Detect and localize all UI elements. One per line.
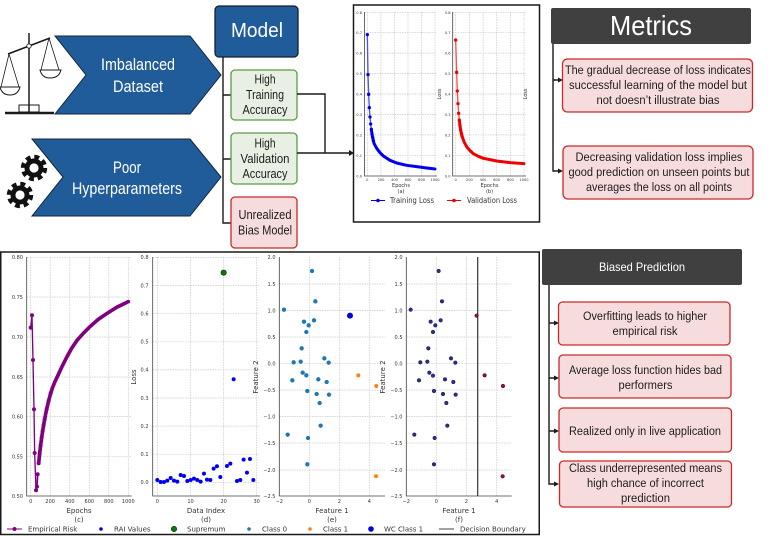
chart: feature scatter f with decision boundary: Feature 1 (442, 507, 476, 515)
chart: feature scatter e: 0.0 (268, 361, 276, 367)
model connector (223, 57, 231, 223)
chart: validation loss: 0.5 (445, 72, 450, 76)
chart: training loss: 200 (378, 178, 385, 182)
box: high validation accuracy: Validation (240, 152, 290, 166)
chart: validation loss: 0 (455, 178, 458, 182)
chart: training loss: 0.2 (356, 134, 362, 138)
chart: validation loss: 600 (493, 178, 501, 182)
chart: feature scatter e: −2.0 (263, 468, 276, 474)
metrics header: Metrics (610, 10, 692, 41)
chart: training loss: 800 (418, 178, 426, 182)
chart: feature scatter f with decision boundary: −0.5 (390, 388, 402, 394)
box: model (215, 6, 298, 57)
chart: training loss: 0.5 (356, 72, 362, 76)
chart: validation loss: 0.2 (445, 134, 450, 138)
chart: RAI values scatter: 20 (221, 499, 227, 505)
chart: feature scatter f with decision boundary: −2.5 (390, 494, 402, 500)
box: unrealized bias model (231, 197, 297, 248)
chart: validation loss: Loss (437, 88, 443, 99)
chart: validation loss: 200 (466, 178, 474, 182)
callout: average loss function (559, 355, 731, 398)
chart: feature scatter f with decision boundary: 2 (465, 499, 468, 505)
chart: validation loss: Loss (523, 88, 529, 99)
callout: decreasing validation loss (563, 146, 753, 199)
chart: RAI values scatter: 10 (187, 499, 194, 505)
chart: training loss: 0.8 (356, 11, 363, 15)
chart: validation loss: 800 (507, 178, 515, 182)
icon: gears (9, 157, 45, 206)
chart: feature scatter e: (e) (327, 516, 337, 524)
chart: feature scatter f with decision boundary: −2 (403, 499, 410, 505)
chart: empirical risk: 0.80 (12, 255, 23, 261)
chart: RAI values scatter: 0.7 (141, 284, 148, 290)
callout: overfitting: Overfitting leads to higher (583, 309, 707, 323)
chart: training loss: (a) (398, 189, 405, 195)
chart: validation loss: 0.8 (445, 11, 451, 15)
chart: RAI values scatter: (d) (201, 516, 211, 524)
callout: realized only in live application (559, 408, 732, 452)
callout: average loss function: Average loss function hides bad (569, 363, 722, 377)
callout: class underrepresented: Class underrepresented means (569, 461, 722, 475)
chart: RAI values scatter: 0.5 (141, 340, 148, 346)
chart: validation loss: Epochs (481, 183, 499, 189)
metrics connectors (553, 44, 563, 174)
panel: biased prediction (542, 249, 742, 507)
chart: RAI values scatter: 0.6 (141, 312, 148, 318)
chart: feature scatter e: 1.0 (268, 308, 276, 314)
chart: validation loss: 0.3 (445, 113, 450, 117)
chart: training loss: 0 (366, 178, 369, 182)
chart: feature scatter e: 0.5 (268, 335, 276, 341)
arrow: imbalanced dataset: Dataset (113, 78, 163, 96)
chart: RAI values scatter: Loss (130, 369, 138, 385)
legend: bias charts: Decision Boundary (460, 526, 526, 534)
callout: decreasing validation loss: good prediction on unseen points but (568, 165, 750, 179)
box: unrealized bias model: Bias Model (238, 224, 292, 238)
legend: loss charts: Training Loss (389, 196, 434, 205)
arrow: poor hyperparameters: Poor (113, 159, 141, 177)
chart: RAI values scatter (130, 255, 260, 524)
callout: class underrepresented: prediction (621, 491, 670, 505)
box: high validation accuracy (231, 133, 297, 184)
chart: empirical risk: 0.50 (12, 494, 23, 500)
chart: feature scatter e: −2 (276, 499, 283, 505)
biased prediction connectors (549, 285, 559, 486)
chart: RAI values scatter: 0.8 (141, 255, 148, 261)
legend: bias charts: Supremum (187, 526, 226, 534)
callout: gradual decrease of loss (562, 59, 752, 112)
chart: empirical risk: 0.65 (12, 375, 23, 381)
chart: training loss: Epochs (392, 183, 410, 189)
chart: validation loss (437, 11, 529, 195)
chart: empirical risk: 0.55 (12, 454, 23, 460)
chart: empirical risk: (c) (74, 516, 84, 524)
chart: training loss: 400 (391, 178, 399, 182)
chart: feature scatter e: 2 (338, 499, 341, 505)
chart: RAI values scatter: Data Index (187, 507, 225, 515)
callout: average loss function: performers (618, 378, 672, 392)
callout: decreasing validation loss: averages the loss on all points (586, 180, 732, 194)
chart: empirical risk: 1000 (122, 499, 135, 505)
panel: bias charts (1, 252, 539, 534)
biased prediction header: Biased Prediction (599, 260, 685, 274)
chart: validation loss: 0.0 (445, 174, 451, 178)
callout: gradual decrease of loss: not doesn’t illustrate bias (596, 93, 720, 107)
callout: overfitting: empirical risk (612, 324, 678, 338)
box: high validation accuracy: High (254, 136, 276, 150)
box: model: Model (231, 19, 283, 42)
chart: empirical risk: 0 (29, 499, 32, 505)
callout: gradual decrease of loss: The gradual decrease of loss indicates (565, 63, 751, 77)
chart: validation loss: (b) (486, 189, 493, 195)
chart: empirical risk: 0.60 (12, 414, 23, 420)
chart: feature scatter f with decision boundary: 1.5 (395, 282, 402, 288)
chart: empirical risk (12, 255, 135, 524)
legend: bias charts: Empirical Risk (28, 526, 78, 534)
chart: validation loss: 0.7 (445, 31, 450, 35)
chart: training loss (356, 11, 440, 195)
arrow: poor hyperparameters: Hyperparameters (72, 180, 182, 198)
chart: RAI values scatter: 0.4 (141, 368, 148, 374)
chart: feature scatter e: 2.0 (268, 255, 276, 261)
chart: empirical risk: 800 (104, 499, 114, 505)
chart: training loss: 0.1 (356, 154, 362, 158)
chart: training loss: 0.0 (356, 174, 363, 178)
box: high training accuracy: Accuracy (242, 103, 288, 117)
chart: empirical risk: 600 (85, 499, 94, 505)
arrow: imbalanced dataset (55, 36, 221, 114)
box: unrealized bias model: Unrealized (238, 208, 292, 222)
legend: loss charts: Validation Loss (467, 196, 517, 205)
chart: RAI values scatter: 0.3 (141, 396, 148, 402)
chart: feature scatter f with decision boundary: −1.0 (390, 414, 402, 420)
chart: feature scatter e: −1.0 (263, 414, 276, 420)
chart: feature scatter e (252, 255, 385, 524)
legend: loss charts (371, 196, 517, 205)
chart: feature scatter e: −0.5 (263, 388, 276, 394)
box: high training accuracy: Training (246, 88, 284, 102)
chart: feature scatter e: 1.5 (268, 282, 276, 288)
callout: class underrepresented: high chance of incorrect (587, 476, 705, 490)
legend: bias charts: Class 1 (323, 526, 348, 534)
legend: bias charts: Class 0 (262, 526, 287, 534)
chart: validation loss: 400 (480, 178, 487, 182)
chart: feature scatter f with decision boundary: 2.0 (395, 255, 402, 261)
chart: empirical risk: 200 (45, 499, 55, 505)
chart: feature scatter f with decision boundary: −1.5 (390, 441, 402, 447)
callout: class underrepresented (560, 461, 732, 507)
box: high validation accuracy: Accuracy (242, 167, 288, 181)
chart: feature scatter f with decision boundary: 0 (435, 499, 438, 505)
box: high training accuracy (231, 70, 297, 120)
chart: feature scatter e: Feature 2 (252, 360, 260, 394)
chart: feature scatter f with decision boundary: −2.0 (390, 468, 402, 474)
chart: feature scatter f with decision boundary: 0.0 (395, 361, 402, 367)
chart: validation loss: 1000 (519, 178, 529, 182)
chart: training loss: 1000 (430, 178, 440, 182)
metrics header (551, 8, 751, 44)
legend: bias charts (7, 526, 526, 534)
chart: empirical risk: 400 (65, 499, 75, 505)
chart: feature scatter e: 0 (308, 499, 311, 505)
chart: empirical risk: 0.70 (12, 335, 23, 341)
chart: RAI values scatter: 0.0 (141, 480, 148, 486)
arrow: accuracy to loss charts (297, 94, 354, 156)
chart: feature scatter f with decision boundary: Feature 2 (379, 360, 387, 394)
chart: validation loss: 0.4 (445, 92, 451, 96)
chart: RAI values scatter: 30 (254, 499, 260, 505)
panel: metrics (551, 8, 753, 199)
callout: realized only in live application: Realized only in live application (569, 424, 721, 438)
callout: decreasing validation loss: Decreasing validation loss implies (576, 150, 742, 164)
panel: loss charts (354, 5, 540, 222)
chart: feature scatter e: −1.5 (263, 441, 276, 447)
chart: feature scatter e: 4 (368, 499, 371, 505)
chart: feature scatter f with decision boundary: (f) (455, 516, 463, 524)
chart: validation loss: 0.1 (445, 154, 450, 158)
chart: RAI values scatter: 0 (156, 499, 159, 505)
chart: empirical risk: 0.75 (12, 295, 23, 301)
legend: bias charts: RAI Values (114, 526, 151, 534)
arrow: imbalanced dataset: Imbalanced (101, 56, 175, 74)
callout: gradual decrease of loss: successful learning of the model but (569, 78, 748, 92)
chart: validation loss: 0.6 (445, 52, 451, 56)
chart: RAI values scatter: 0.1 (141, 452, 148, 458)
chart: RAI values scatter: 0.2 (141, 424, 148, 430)
arrow: poor hyperparameters (32, 139, 221, 216)
callout: overfitting (558, 302, 730, 345)
chart: training loss: 600 (405, 178, 412, 182)
box: high training accuracy: High (254, 72, 276, 86)
chart: feature scatter f with decision boundary: 0.5 (395, 335, 402, 341)
chart: training loss: 0.7 (356, 31, 362, 35)
legend: bias charts: WC Class 1 (384, 526, 423, 534)
chart: feature scatter f with decision boundary (379, 255, 512, 524)
biased prediction header (542, 249, 742, 285)
chart: feature scatter e: −2.5 (263, 494, 276, 500)
chart: feature scatter e: Feature 1 (315, 507, 349, 515)
chart: training loss: 0.3 (356, 113, 362, 117)
icon: balance scale (0, 33, 61, 113)
chart: training loss: 0.4 (356, 92, 363, 96)
chart: training loss: 0.6 (356, 52, 363, 56)
chart: feature scatter f with decision boundary: 1.0 (395, 308, 402, 314)
chart: feature scatter f with decision boundary: 4 (495, 499, 498, 505)
chart: empirical risk: Epochs (66, 507, 92, 515)
